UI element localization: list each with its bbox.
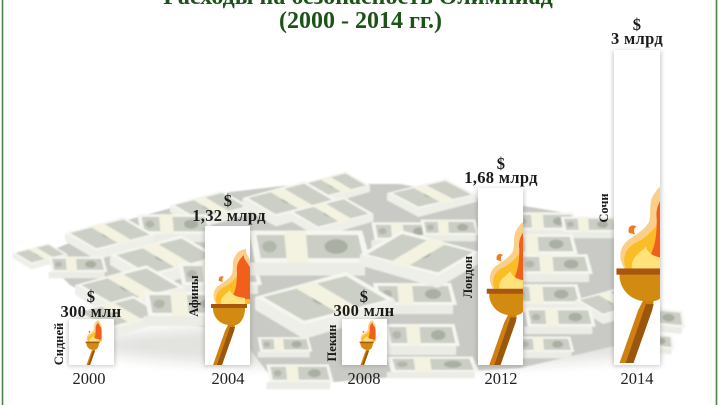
bar: Sydney 2000: 300 млн [61, 302, 122, 321]
bar: Beijing 2008: $ [360, 287, 368, 306]
money pile background [12, 171, 687, 389]
bar: Sochi 2014: $ [633, 15, 641, 34]
bar: Sochi 2014 [600, 18, 664, 384]
bar: Sydney 2000 [54, 290, 121, 384]
bar: Sochi 2014: 2014 [620, 369, 654, 388]
bar: Athens 2004: $ [224, 191, 232, 210]
bar: Athens 2004: Афины [187, 275, 201, 317]
bar: London 2012: 2012 [484, 369, 518, 388]
bar: Athens 2004: 2004 [212, 369, 244, 388]
bar: London 2012: 1,68 млрд [464, 168, 538, 187]
bar: Beijing 2008: 2008 [348, 369, 380, 388]
bar: London 2012 [461, 154, 538, 388]
bar: Sochi 2014: Сочи [597, 193, 611, 223]
bar: Beijing 2008 [328, 290, 394, 384]
bar: Sydney 2000: $ [87, 287, 95, 306]
bar: Beijing 2008: Пекин [325, 325, 339, 361]
title: (2000 - 2014 гг.) [279, 8, 442, 34]
bar: Sydney 2000: 2000 [72, 369, 106, 388]
bar: Athens 2004: 1,32 млрд [192, 206, 266, 225]
bar: Sochi 2014: 3 млрд [611, 29, 663, 48]
bar: London 2012: Лондон [461, 256, 475, 298]
bar: Athens 2004 [187, 191, 266, 388]
title [163, 0, 553, 34]
bar: Sydney 2000: Сидней [52, 323, 66, 365]
bar: Beijing 2008: 300 млн [334, 301, 395, 320]
bar: London 2012: $ [497, 154, 505, 173]
